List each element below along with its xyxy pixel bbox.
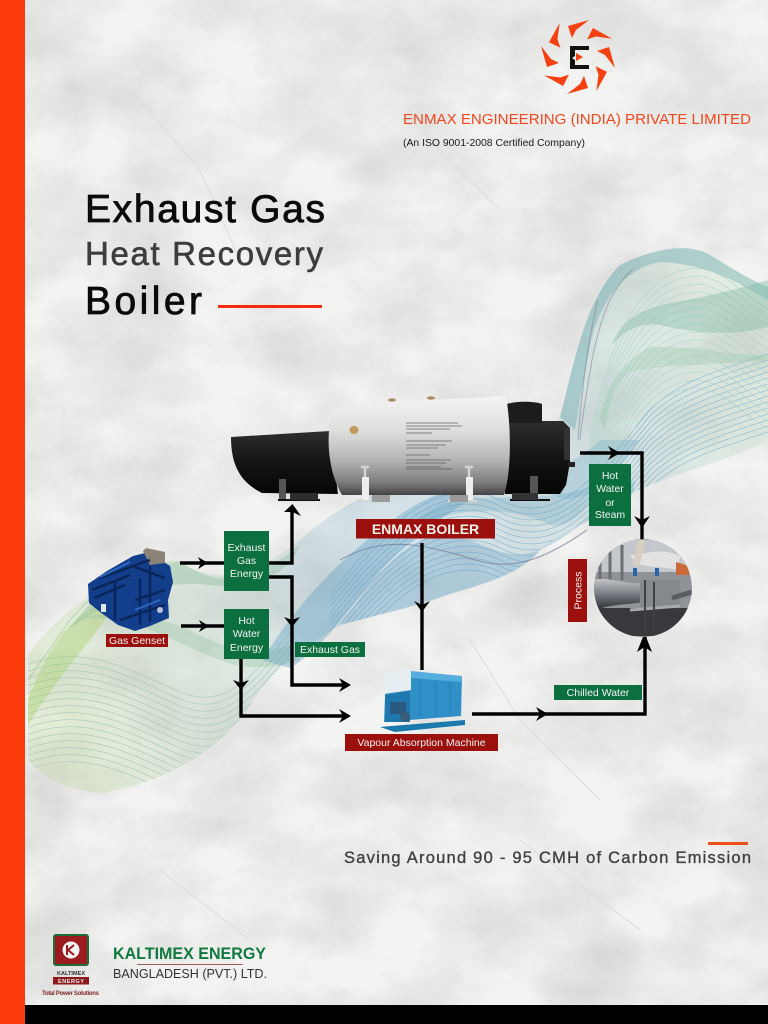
hot water or steam label: or xyxy=(605,497,615,509)
label: exhaust gas energy: Energy xyxy=(230,568,264,580)
title: Heat Recovery xyxy=(85,235,324,272)
process label: Process xyxy=(572,572,584,609)
boiler label xyxy=(356,519,495,538)
Kaltimex logo: ENERGY xyxy=(58,979,84,985)
bottom black bar xyxy=(25,1005,768,1024)
arrow: boiler to process xyxy=(580,446,650,545)
Kaltimex company name: BANGLADESH (PVT.) LTD. xyxy=(113,966,267,981)
decorative wave ribbon xyxy=(20,248,768,802)
label: exhaust gas xyxy=(295,642,365,657)
gas genset label: Gas Genset xyxy=(109,635,165,647)
left red bar xyxy=(0,0,25,1024)
company logo: Enmax star xyxy=(541,20,615,94)
label: exhaust gas energy: Exhaust xyxy=(228,542,266,554)
title: Boiler xyxy=(85,280,202,323)
icon: vapour absorption machine xyxy=(380,669,465,732)
label: hot water energy: Hot xyxy=(238,615,255,627)
label: exhaust gas: Exhaust Gas xyxy=(300,644,360,656)
Kaltimex logo: KALTIMEX xyxy=(57,971,85,977)
arrow: boiler to vapour absorption machine xyxy=(414,543,430,670)
icon: process plant photo xyxy=(590,539,695,637)
boiler label: ENMAX BOILER xyxy=(372,521,479,537)
company name: ENMAX ENGINEERING (INDIA) PRIVATE LIMITED xyxy=(403,111,751,128)
vapour absorption machine label: Vapour Absorption Machine xyxy=(357,737,486,749)
chilled water label xyxy=(554,685,642,700)
Kaltimex company name xyxy=(113,945,267,981)
icon: gas genset xyxy=(88,548,173,631)
label: hot water energy: Energy xyxy=(230,642,264,654)
ISO certification line: (An ISO 9001-2008 Certified Company) xyxy=(403,137,585,149)
Kaltimex logo xyxy=(42,935,100,997)
emission saving note: Saving Around 90 - 95 CMH of Carbon Emission xyxy=(344,849,751,867)
Kaltimex logo: Total Power Solutions xyxy=(42,991,100,997)
process label xyxy=(568,559,587,622)
Kaltimex company name: KALTIMEX ENERGY xyxy=(113,945,266,963)
hot water or steam label: Steam xyxy=(595,509,625,521)
label: hot water energy xyxy=(224,609,269,659)
hot water or steam label: Water xyxy=(596,483,624,495)
vapour absorption machine label xyxy=(345,734,498,751)
label: exhaust gas energy: Gas xyxy=(237,555,256,567)
title xyxy=(85,188,325,323)
arrows: genset and exhaust routes xyxy=(180,504,351,723)
label: exhaust gas energy xyxy=(224,531,269,591)
label: hot water energy: Water xyxy=(233,628,261,640)
hot water or steam label xyxy=(589,464,631,526)
arrow: chilled water return xyxy=(472,633,652,721)
chilled water label: Chilled Water xyxy=(567,687,630,699)
hot water or steam label: Hot xyxy=(602,470,618,482)
boiler illustration xyxy=(231,396,575,502)
title: Exhaust Gas xyxy=(85,188,325,231)
